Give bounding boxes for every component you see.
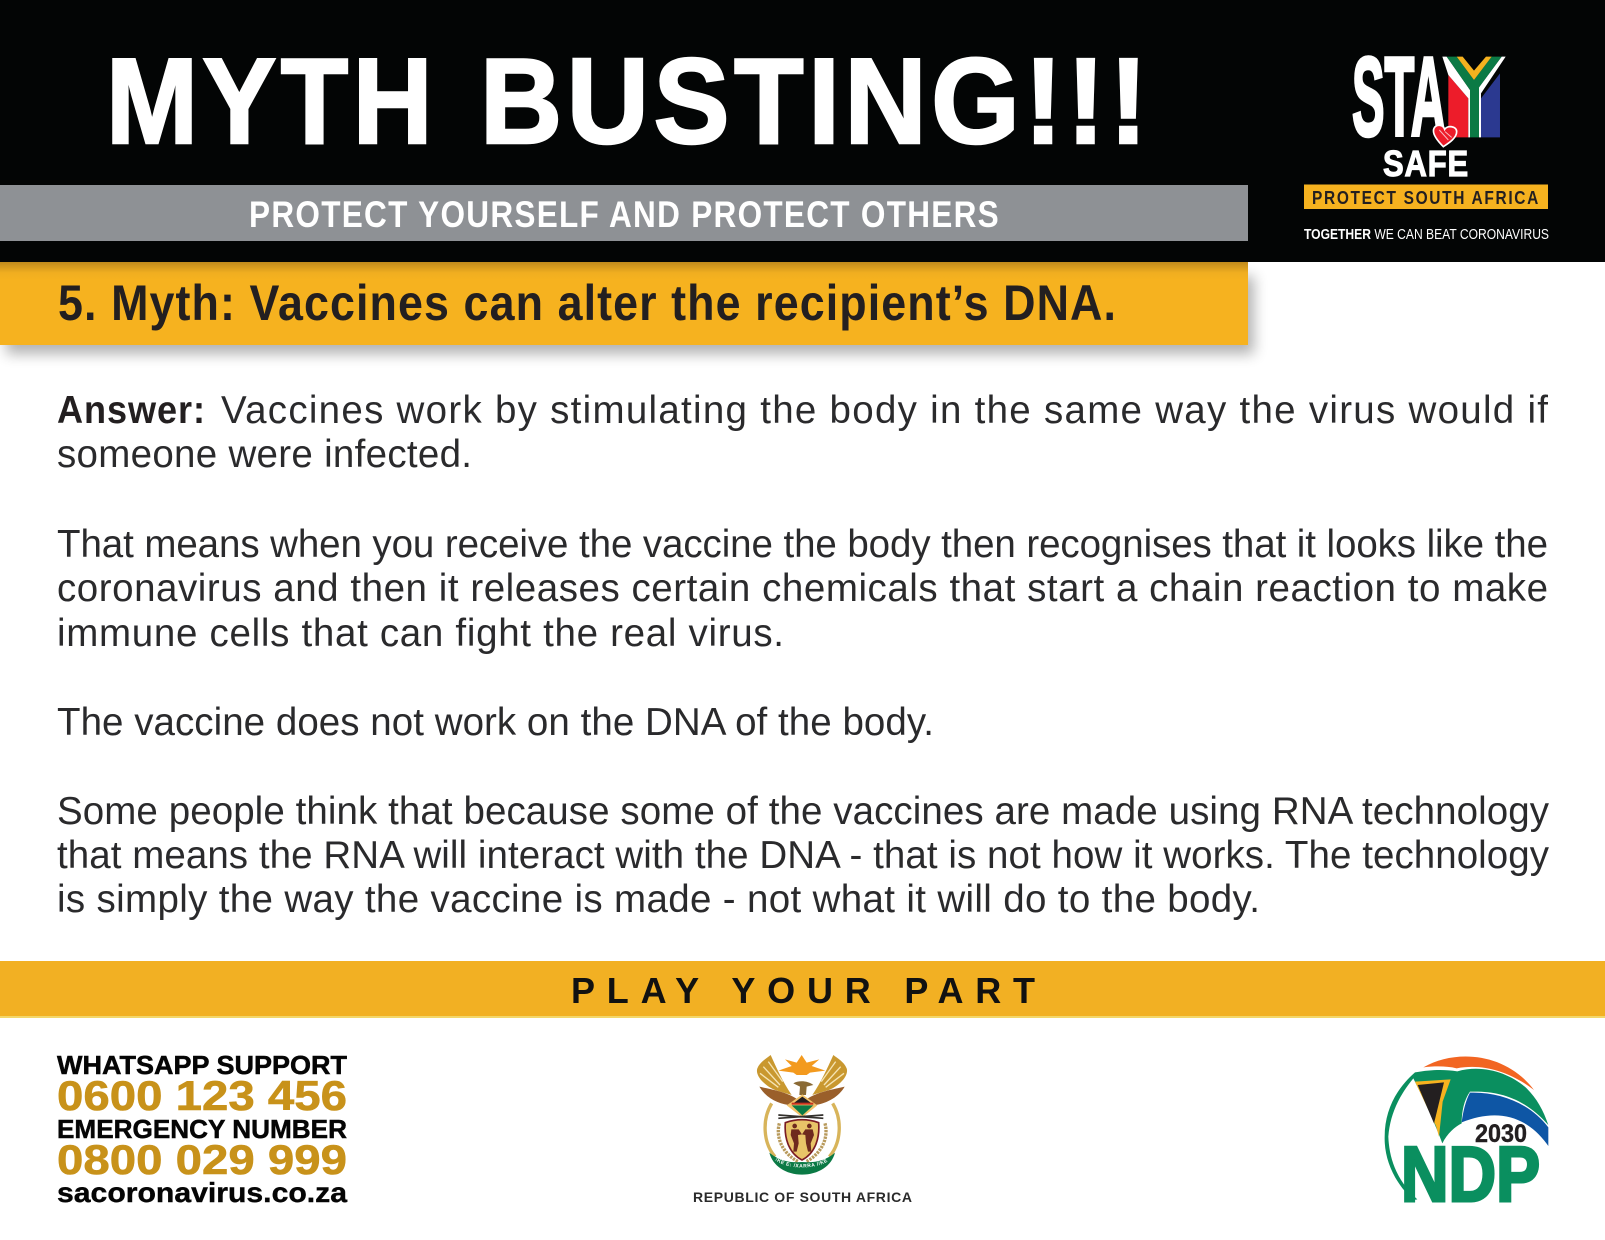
wheat xyxy=(778,1123,826,1162)
panel: myth heading bar xyxy=(0,262,1254,354)
icon: coat of arms xyxy=(756,1055,848,1175)
paragraph 4 xyxy=(57,790,1550,921)
ribbon motto: !KE E: /XARRA //KE xyxy=(775,1158,828,1168)
shield figures xyxy=(791,1124,814,1152)
2030 label: 2030 xyxy=(1475,1120,1527,1148)
logo: NDP 2030 xyxy=(1385,1056,1548,1218)
diamond protea xyxy=(787,1094,817,1117)
paragraph 2: coronavirus and then it releases certain chemicals that start a chain reaction to make xyxy=(57,567,1548,610)
title xyxy=(106,33,1152,169)
subtitle bar: PROTECT YOURSELF AND PROTECT OTHERS xyxy=(249,194,1000,235)
title: BUSTING!!! xyxy=(480,33,1152,169)
banner: play your part xyxy=(0,961,1605,1018)
lower wings xyxy=(759,1087,845,1105)
paragraph 2: That means when you receive the vaccine the body then recognises that it looks like the xyxy=(57,523,1548,566)
icon: South African flag Y xyxy=(1442,57,1506,137)
spear and knobkierie xyxy=(778,1115,823,1118)
icon: heart xyxy=(1433,125,1457,147)
wing feathers xyxy=(760,1062,844,1087)
whatsapp label: WHATSAPP SUPPORT xyxy=(57,1050,347,1080)
title: MYTH xyxy=(106,33,437,169)
answer label: Answer: xyxy=(57,389,206,432)
logo swoosh shapes xyxy=(1385,1056,1548,1200)
logo word SAFE: SAFE xyxy=(1383,143,1469,184)
panel: myth heading bar: 5. Myth: Vaccines can alter the recipient’s DNA. xyxy=(58,275,1117,331)
subtitle bar xyxy=(0,185,1248,241)
paragraph 1 xyxy=(57,389,1548,476)
website: sacoronavirus.co.za xyxy=(57,1177,347,1208)
whatsapp number: 0600 123 456 xyxy=(57,1072,347,1119)
tusks xyxy=(765,1103,839,1157)
paragraph 4: is simply the way the vaccine is made - not what it will do to the body. xyxy=(57,878,1260,921)
coat of arms caption: REPUBLIC OF SOUTH AFRICA xyxy=(693,1189,912,1205)
upper wings xyxy=(757,1055,847,1095)
paragraph 4: that means the RNA will interact with the DNA - that is not how it works. The technology xyxy=(57,834,1550,877)
NDP label: NDP xyxy=(1401,1130,1540,1218)
text block: answer body xyxy=(57,389,1550,921)
shield xyxy=(785,1120,819,1160)
paragraph 1: someone were infected. xyxy=(57,433,472,476)
emergency label: EMERGENCY NUMBER xyxy=(57,1114,347,1144)
paragraph 2 xyxy=(57,523,1548,655)
logo: Stay Safe Protect South Africa xyxy=(1304,34,1549,243)
sun xyxy=(778,1055,825,1075)
eagle head xyxy=(793,1081,813,1095)
logo: Stay Safe Protect South Africa: STA xyxy=(1352,34,1446,160)
emergency number: 0800 029 999 xyxy=(57,1136,347,1183)
banner: play your part: PLAY YOUR PART xyxy=(571,970,1035,1011)
paragraph 4: Some people think that because some of the vaccines are made using RNA technology xyxy=(57,790,1550,833)
paragraph 1: Vaccines work by stimulating the body in the same way the virus would if xyxy=(221,389,1548,432)
protect south africa tag: PROTECT SOUTH AFRICA xyxy=(1312,187,1540,208)
green ribbon xyxy=(769,1153,835,1175)
paragraph 3: The vaccine does not work on the DNA of the body. xyxy=(57,701,934,744)
paragraph 2: immune cells that can fight the real virus. xyxy=(57,612,784,655)
panel: black header xyxy=(0,0,1605,262)
contact block xyxy=(57,1050,347,1208)
together tagline: TOGETHER WE CAN BEAT CORONAVIRUS xyxy=(1304,227,1549,243)
